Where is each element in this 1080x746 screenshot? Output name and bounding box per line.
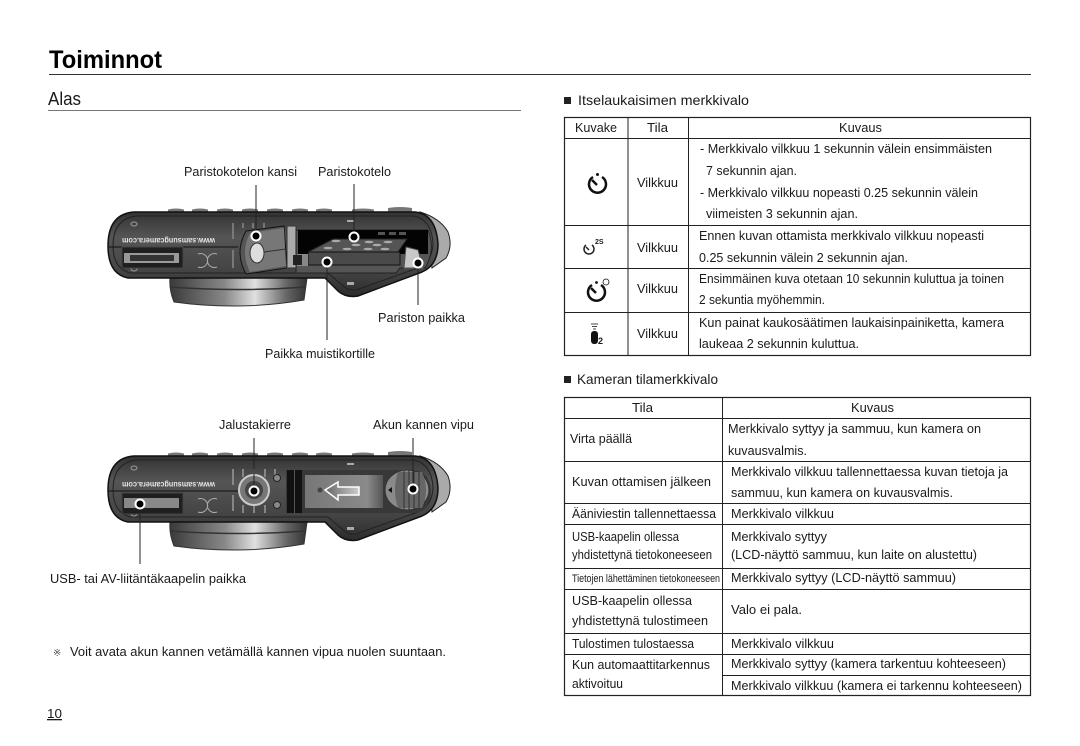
callout: Paristokotelon kansi: Paristokotelon kansi	[184, 164, 297, 179]
callout: Jalustakierre	[219, 417, 291, 496]
row: self-timer: Vilkkuu	[637, 175, 678, 190]
heading: Kameran tilamerkkivalo: Kameran tilamerkkivalo	[577, 371, 718, 387]
title: Toiminnot	[49, 46, 163, 74]
callout: USB- tai AV-liitäntäkaapelin paikka	[50, 500, 247, 586]
icon: timer	[589, 173, 606, 193]
table header	[575, 120, 882, 135]
row: 2 second timer: 0.25 sekunnin välein 2 sekunnin ajan.	[699, 250, 908, 265]
row: remote timer	[591, 315, 1005, 351]
section heading: Alas: Alas	[48, 89, 81, 109]
row: data transfer	[572, 570, 956, 585]
row: 2 second timer: Ennen kuvan ottamista merkkivalo vilkkuu nopeasti	[699, 228, 984, 243]
row: remote timer: Vilkkuu	[637, 326, 678, 341]
row: power on	[570, 421, 981, 458]
row: after capture	[572, 464, 1009, 500]
row: USB to computer: Merkkivalo syttyy	[731, 529, 827, 544]
table grid	[564, 117, 1030, 356]
callout: Pariston paikka: Pariston paikka	[378, 310, 466, 325]
camera illustration	[108, 451, 450, 550]
callout: Paristokotelo	[318, 164, 391, 242]
callout: Akun kannen vipu: Akun kannen vipu	[373, 417, 474, 432]
camera illustration: www.samsungcamera.com	[122, 480, 216, 489]
callout: Paristokotelon kansi	[184, 164, 297, 240]
row: self-timer: - Merkkivalo vilkkuu nopeasti 0.25 sekunnin välein	[700, 185, 978, 200]
callout: Jalustakierre: Jalustakierre	[219, 417, 291, 432]
row: voice recording: Ääniviestin tallennettaessa	[572, 506, 717, 521]
table header: Kuvake	[575, 120, 617, 135]
row: double timer: Vilkkuu	[637, 281, 678, 296]
row: after capture: Merkkivalo vilkkuu tallennettaessa kuvan tietoja ja	[731, 464, 1009, 479]
row: self-timer: 7 sekunnin ajan.	[706, 163, 797, 178]
row: data transfer: Merkkivalo syttyy (LCD-näyttö sammuu)	[731, 570, 956, 585]
row: USB to printer	[572, 593, 802, 628]
camera illustration: www.samsungcamera.com	[122, 236, 216, 245]
camera diagram: battery cover closed	[50, 417, 474, 586]
row: USB to computer: (LCD-näyttö sammuu, kun laite on alustettu)	[731, 547, 977, 562]
row: USB to printer: USB-kaapelin ollessa	[572, 593, 693, 608]
row: USB to computer: yhdistettynä tietokoneeseen	[572, 547, 712, 562]
table header: Tila	[647, 120, 669, 135]
icon: double timer	[588, 279, 609, 301]
callout: Akun kannen vipu	[373, 417, 474, 494]
callout: Paikka muistikortille	[265, 258, 375, 361]
table header: Kuvaus	[851, 400, 894, 415]
row: USB to computer	[572, 529, 977, 562]
callout: Pariston paikka	[378, 258, 466, 325]
row: printing: Tulostimen tulostaessa	[572, 636, 695, 651]
table grid	[564, 397, 1030, 696]
row: self-timer: viimeisten 3 sekunnin ajan.	[706, 206, 858, 221]
row: remote timer: laukeaa 2 sekunnin kuluttua.	[699, 336, 859, 351]
table header: Tila	[632, 400, 654, 415]
row: self-timer: - Merkkivalo vilkkuu 1 sekunnin välein ensimmäisten	[700, 141, 992, 156]
row: power on: Virta päällä	[570, 431, 633, 446]
row: autofocus: Merkkivalo syttyy (kamera tarkentuu kohteeseen)	[731, 656, 1006, 671]
page number: 10	[47, 706, 62, 721]
arrow on battery cover	[325, 482, 359, 500]
callout: Paikka muistikortille: Paikka muistikortille	[265, 346, 375, 361]
row: printing	[572, 636, 834, 651]
table header	[632, 400, 894, 415]
table header: Kuvaus	[839, 120, 882, 135]
row: after capture: Kuvan ottamisen jälkeen	[572, 474, 711, 489]
row: 2 second timer: Vilkkuu	[637, 240, 678, 255]
row: after capture: sammuu, kun kamera on kuvausvalmis.	[731, 485, 953, 500]
row: printing: Merkkivalo vilkkuu	[731, 636, 834, 651]
row: data transfer: Tietojen lähettäminen tietokoneeseen	[572, 573, 720, 585]
row: autofocus	[572, 656, 1022, 693]
row: USB to printer: yhdistettynä tulostimeen	[572, 613, 708, 628]
callout: USB- tai AV-liitäntäkaapelin paikka: USB- tai AV-liitäntäkaapelin paikka	[50, 571, 247, 586]
icon: remote	[591, 324, 603, 346]
row: 2 second timer	[584, 228, 984, 265]
row: autofocus: Merkkivalo vilkkuu (kamera ei tarkennu kohteeseen)	[731, 678, 1022, 693]
icon: timer 2s: 2S	[595, 239, 604, 246]
camera illustration	[108, 207, 450, 306]
note: ※	[53, 648, 61, 659]
row: self-timer	[589, 141, 992, 221]
callout: Paristokotelo: Paristokotelo	[318, 164, 391, 179]
camera diagram: battery compartment open	[108, 164, 466, 361]
row: voice recording	[572, 506, 834, 521]
row: autofocus: aktivoituu	[572, 676, 623, 691]
row: power on: Merkkivalo syttyy ja sammuu, kun kamera on	[728, 421, 981, 436]
row: double timer: 2 sekuntia myöhemmin.	[699, 292, 825, 307]
row: USB to printer: Valo ei pala.	[731, 602, 802, 617]
row: power on: kuvausvalmis.	[728, 443, 807, 458]
icon: timer 2s	[584, 239, 604, 254]
row: remote timer: Kun painat kaukosäätimen laukaisinpainiketta, kamera	[699, 315, 1005, 330]
row: double timer: Ensimmäinen kuva otetaan 10 sekunnin kuluttua ja toinen	[699, 271, 1004, 286]
row: voice recording: Merkkivalo vilkkuu	[731, 506, 834, 521]
icon: remote: 2	[598, 336, 603, 346]
row: double timer	[588, 271, 1004, 307]
row: autofocus: Kun automaattitarkennus	[572, 657, 710, 672]
table: self-timer lamp	[564, 117, 1030, 356]
heading: Itselaukaisimen merkkivalo: Itselaukaisimen merkkivalo	[578, 92, 749, 108]
row: USB to computer: USB-kaapelin ollessa	[572, 529, 680, 544]
note: Voit avata akun kannen vetämällä kannen vipua nuolen suuntaan.	[70, 644, 446, 659]
table: camera status lamp	[564, 397, 1030, 696]
